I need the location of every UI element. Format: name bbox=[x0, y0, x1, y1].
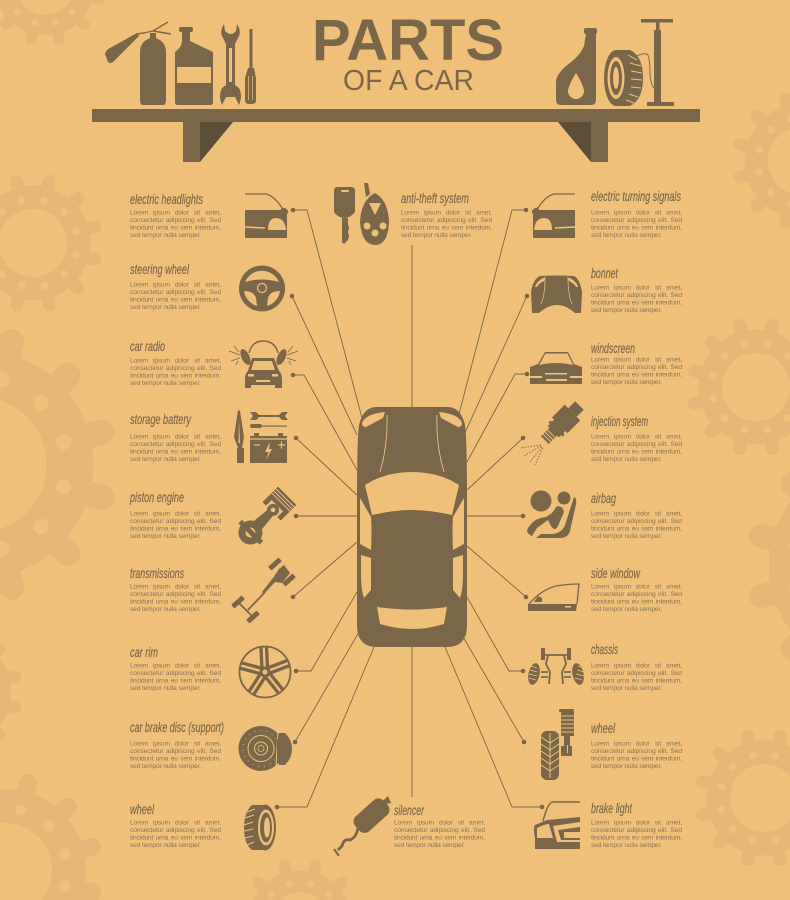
panel: wheel right bbox=[541, 709, 682, 780]
panel: electric headlights bbox=[130, 191, 289, 239]
panel: injection system bbox=[520, 398, 682, 465]
heading: wheel: wheel bbox=[130, 801, 155, 817]
icon: fire extinguisher bbox=[105, 22, 171, 105]
text: car brake disc bbox=[130, 740, 221, 770]
text: car radio: Lorem ipsum dolor sit amet, bbox=[130, 358, 221, 364]
text: car rim: tincidunt urna eu sem interdum, bbox=[130, 678, 221, 684]
text: windscreen: tincidunt urna eu sem interdum, bbox=[591, 372, 682, 378]
heading: chassis: chassis bbox=[591, 641, 618, 657]
text: windscreen: sed tempor nulla semper. bbox=[591, 379, 662, 386]
text: chassis: consectetur adipiscing elit. Sed bbox=[591, 670, 682, 677]
text: transmissions: Lorem ipsum dolor sit amet, bbox=[130, 584, 221, 590]
text: electric headlights: sed tempor nulla semper. bbox=[130, 232, 201, 239]
panel: electric turning signals bbox=[531, 188, 682, 239]
heading: brake light: brake light bbox=[591, 800, 633, 816]
text: car brake disc: sed tempor nulla semper. bbox=[130, 763, 201, 770]
text: chassis: sed tempor nulla semper. bbox=[591, 685, 662, 692]
text: steering wheel: Lorem ipsum dolor sit amet, bbox=[130, 282, 221, 288]
text: piston engine bbox=[130, 510, 221, 540]
text: wheel: consectetur adipiscing elit. Sed bbox=[130, 827, 221, 834]
panel: car radio bbox=[130, 338, 298, 388]
text: transmissions bbox=[130, 584, 221, 613]
text: wheel bbox=[591, 740, 682, 770]
panel: airbag bbox=[527, 490, 682, 540]
icon: wheel with shock absorber bbox=[541, 709, 574, 780]
text: brake light: Lorem ipsum dolor sit amet, bbox=[591, 820, 682, 826]
text: silencer: tincidunt urna eu sem interdum, bbox=[394, 834, 485, 842]
icon: tyre bbox=[604, 50, 643, 106]
text: silencer: Lorem ipsum dolor sit amet, bbox=[394, 820, 485, 826]
text: piston engine: sed tempor nulla semper. bbox=[130, 533, 201, 540]
text: car radio: tincidunt urna eu sem interdum, bbox=[130, 372, 221, 380]
text: steering wheel: sed tempor nulla semper. bbox=[130, 304, 201, 311]
text: bonnet: Lorem ipsum dolor sit amet, bbox=[591, 284, 682, 292]
text: wheel: sed tempor nulla semper. bbox=[130, 842, 201, 849]
heading: bonnet: bonnet bbox=[591, 265, 619, 281]
text: airbag: sed tempor nulla semper. bbox=[591, 533, 662, 540]
heading: windscreen: windscreen bbox=[591, 340, 635, 356]
text: steering wheel bbox=[130, 282, 221, 311]
panel: side window bbox=[528, 565, 682, 613]
text: side window bbox=[591, 584, 682, 613]
text: silencer: consectetur adipiscing elit. Sed bbox=[394, 827, 485, 834]
text: piston engine: Lorem ipsum dolor sit amet, bbox=[130, 510, 221, 518]
heading: silencer: silencer bbox=[394, 802, 425, 818]
icon: bonnet bbox=[531, 276, 582, 313]
gear: left large bbox=[0, 342, 102, 587]
gear: left lower bbox=[0, 633, 15, 751]
text: wheel: tincidunt urna eu sem interdum, bbox=[130, 834, 221, 842]
text: electric turning signals: consectetur adipiscing elit. Sed bbox=[591, 217, 682, 224]
text: car brake disc: consectetur adipiscing elit. Sed bbox=[130, 748, 221, 755]
icon: turning signal bbox=[531, 194, 575, 238]
heading: steering wheel: steering wheel bbox=[130, 261, 190, 277]
text: storage battery bbox=[130, 434, 221, 463]
panel: steering wheel bbox=[130, 261, 285, 312]
icon: piston bbox=[231, 485, 298, 552]
text: transmissions: sed tempor nulla semper. bbox=[130, 606, 201, 613]
text: electric headlights: tincidunt urna eu sem interdum, bbox=[130, 224, 221, 232]
gear: right bottom bbox=[702, 736, 790, 860]
text: wheel: Lorem ipsum dolor sit amet, bbox=[591, 740, 682, 748]
icon: injector bbox=[520, 398, 587, 465]
heading: side window: side window bbox=[591, 565, 641, 581]
text: electric turning signals: sed tempor nulla semper. bbox=[591, 232, 662, 239]
text: anti-theft system: consectetur adipiscing elit. Sed bbox=[401, 217, 492, 224]
text: chassis bbox=[591, 662, 682, 692]
text: wheel: sed tempor nulla semper. bbox=[591, 763, 662, 770]
heading: wheel: wheel bbox=[591, 720, 616, 736]
text: car brake disc: tincidunt urna eu sem interdum, bbox=[130, 756, 221, 762]
heading: electric headlights: electric headlights bbox=[130, 191, 203, 207]
heading: car rim: car rim bbox=[130, 644, 158, 660]
text: electric turning signals: tincidunt urna eu sem interdum, bbox=[591, 224, 682, 232]
text: storage battery: Lorem ipsum dolor sit amet, bbox=[130, 434, 221, 440]
icon: silencer bbox=[334, 796, 392, 856]
text: injection system bbox=[591, 434, 682, 463]
panel: storage battery bbox=[130, 410, 288, 463]
text: windscreen bbox=[591, 356, 682, 386]
text: electric turning signals: Lorem ipsum dolor sit amet, bbox=[591, 210, 682, 216]
text: injection system: Lorem ipsum dolor sit amet, bbox=[591, 434, 682, 440]
text: chassis: tincidunt urna eu sem interdum, bbox=[591, 678, 682, 684]
panel: car rim bbox=[130, 644, 291, 698]
text: piston engine: consectetur adipiscing elit. Sed bbox=[130, 518, 221, 525]
text: wheel bbox=[130, 820, 221, 849]
heading: injection system: injection system bbox=[591, 413, 648, 429]
text: anti-theft system bbox=[401, 210, 492, 239]
panel: piston engine bbox=[129, 485, 298, 552]
text: windscreen: consectetur adipiscing elit. Sed bbox=[591, 364, 682, 371]
text: steering wheel: consectetur adipiscing elit. Sed bbox=[130, 289, 221, 296]
text: side window: Lorem ipsum dolor sit amet, bbox=[591, 584, 682, 590]
text: car radio bbox=[130, 358, 221, 387]
icon: car key and fob bbox=[334, 183, 389, 245]
panel: transmissions bbox=[130, 557, 296, 624]
icon: oil canister bbox=[175, 27, 213, 105]
text: car brake disc: Lorem ipsum dolor sit amet, bbox=[130, 740, 221, 748]
icon: brake disc bbox=[238, 726, 292, 771]
text: silencer bbox=[394, 820, 485, 849]
text: bonnet: tincidunt urna eu sem interdum, bbox=[591, 300, 682, 306]
text: anti-theft system: Lorem ipsum dolor sit amet, bbox=[401, 210, 492, 216]
heading: car radio: car radio bbox=[130, 338, 165, 354]
panel: car brake disc bbox=[130, 719, 292, 771]
text: wheel: consectetur adipiscing elit. Sed bbox=[591, 748, 682, 755]
text: car rim: consectetur adipiscing elit. Sed bbox=[130, 670, 221, 677]
icon: screwdriver bbox=[245, 29, 256, 104]
car top view bbox=[357, 407, 467, 647]
icon: battery and tools bbox=[234, 410, 288, 463]
icon: brake light bbox=[534, 802, 580, 849]
title: OF A CAR bbox=[343, 65, 474, 97]
panel: wheel left bbox=[130, 801, 276, 850]
text: windscreen: Lorem ipsum dolor sit amet, bbox=[591, 356, 682, 364]
gear: bottom left bbox=[0, 783, 92, 900]
text: storage battery: sed tempor nulla semper. bbox=[130, 456, 201, 463]
text: anti-theft system: tincidunt urna eu sem interdum, bbox=[401, 224, 492, 232]
icon: steering wheel bbox=[239, 266, 285, 312]
text: airbag: consectetur adipiscing elit. Sed bbox=[591, 518, 682, 525]
icon: tyre bbox=[244, 804, 276, 850]
text: electric headlights bbox=[130, 210, 221, 239]
title: PARTS bbox=[312, 8, 504, 73]
gear: right top bbox=[740, 99, 790, 223]
icon: air pump bbox=[635, 19, 674, 106]
text: bonnet bbox=[591, 284, 682, 314]
icon: windscreen bbox=[530, 352, 582, 384]
gear: bottom middle bbox=[252, 866, 348, 900]
text: electric headlights: consectetur adipiscing elit. Sed bbox=[130, 217, 221, 224]
text: brake light: tincidunt urna eu sem interdum, bbox=[591, 834, 682, 842]
text: airbag: tincidunt urna eu sem interdum, bbox=[591, 526, 682, 532]
shelf bbox=[92, 109, 700, 162]
icon: oil bottle bbox=[556, 28, 597, 105]
text: injection system: tincidunt urna eu sem interdum, bbox=[591, 448, 682, 456]
text: car radio: consectetur adipiscing elit. Sed bbox=[130, 365, 221, 372]
text: car rim: Lorem ipsum dolor sit amet, bbox=[130, 662, 221, 670]
text: piston engine: tincidunt urna eu sem interdum, bbox=[130, 526, 221, 532]
icon: chassis bbox=[526, 648, 586, 686]
panel: silencer bbox=[334, 796, 485, 856]
text: steering wheel: tincidunt urna eu sem interdum, bbox=[130, 296, 221, 304]
text: wheel: Lorem ipsum dolor sit amet, bbox=[130, 820, 221, 826]
text: storage battery: consectetur adipiscing elit. Sed bbox=[130, 441, 221, 448]
heading: electric turning signals: electric turning signals bbox=[591, 188, 681, 204]
gear: top left bbox=[0, 0, 99, 39]
gear: right lower bbox=[761, 452, 790, 680]
text: silencer: sed tempor nulla semper. bbox=[394, 842, 465, 849]
text: brake light: consectetur adipiscing elit. Sed bbox=[591, 827, 682, 834]
icon: car with speakers bbox=[229, 341, 298, 388]
text: chassis: Lorem ipsum dolor sit amet, bbox=[591, 662, 682, 670]
text: transmissions: tincidunt urna eu sem interdum, bbox=[130, 598, 221, 606]
gear: left upper bbox=[0, 181, 95, 305]
text: side window: sed tempor nulla semper. bbox=[591, 606, 662, 613]
text: storage battery: tincidunt urna eu sem interdum, bbox=[130, 448, 221, 456]
text: electric headlights: Lorem ipsum dolor sit amet, bbox=[130, 210, 221, 216]
heading: transmissions: transmissions bbox=[130, 565, 184, 581]
text: brake light bbox=[591, 820, 682, 849]
panel: brake light bbox=[534, 800, 682, 849]
connector lines bbox=[275, 208, 544, 809]
text: airbag bbox=[591, 510, 682, 540]
icon: car rim bbox=[239, 646, 291, 698]
text: wheel: tincidunt urna eu sem interdum, bbox=[591, 756, 682, 762]
panel: anti-theft system bbox=[334, 183, 492, 245]
text: bonnet: consectetur adipiscing elit. Sed bbox=[591, 292, 682, 299]
icon: wrench bbox=[220, 24, 241, 105]
text: car radio: sed tempor nulla semper. bbox=[130, 380, 201, 387]
heading: anti-theft system: anti-theft system bbox=[401, 190, 469, 206]
icon: headlight bbox=[245, 194, 289, 238]
text: car rim bbox=[130, 662, 221, 692]
gear: right middle bbox=[694, 325, 790, 449]
heading: car brake disc: car brake disc (support) bbox=[130, 719, 224, 735]
text: injection system: consectetur adipiscing elit. Sed bbox=[591, 441, 682, 448]
text: transmissions: consectetur adipiscing elit. Sed bbox=[130, 591, 221, 598]
text: bonnet: sed tempor nulla semper. bbox=[591, 307, 662, 314]
text: injection system: sed tempor nulla semper. bbox=[591, 456, 662, 463]
text: anti-theft system: sed tempor nulla semper. bbox=[401, 232, 472, 239]
heading: storage battery: storage battery bbox=[130, 411, 192, 427]
text: side window: consectetur adipiscing elit. Sed bbox=[591, 591, 682, 598]
icon: airbag bbox=[527, 490, 576, 538]
heading: piston engine: piston engine bbox=[129, 489, 184, 505]
heading: airbag: airbag bbox=[591, 490, 616, 506]
text: brake light: sed tempor nulla semper. bbox=[591, 842, 662, 849]
icon: side window bbox=[528, 584, 579, 611]
panel: chassis bbox=[526, 641, 682, 692]
text: airbag: Lorem ipsum dolor sit amet, bbox=[591, 510, 682, 518]
text: electric turning signals bbox=[591, 210, 682, 239]
panel: windscreen bbox=[530, 340, 682, 386]
icon: drivetrain bbox=[231, 557, 296, 624]
text: side window: tincidunt urna eu sem interdum, bbox=[591, 598, 682, 606]
panel: bonnet bbox=[531, 265, 682, 314]
text: car rim: sed tempor nulla semper. bbox=[130, 685, 201, 692]
